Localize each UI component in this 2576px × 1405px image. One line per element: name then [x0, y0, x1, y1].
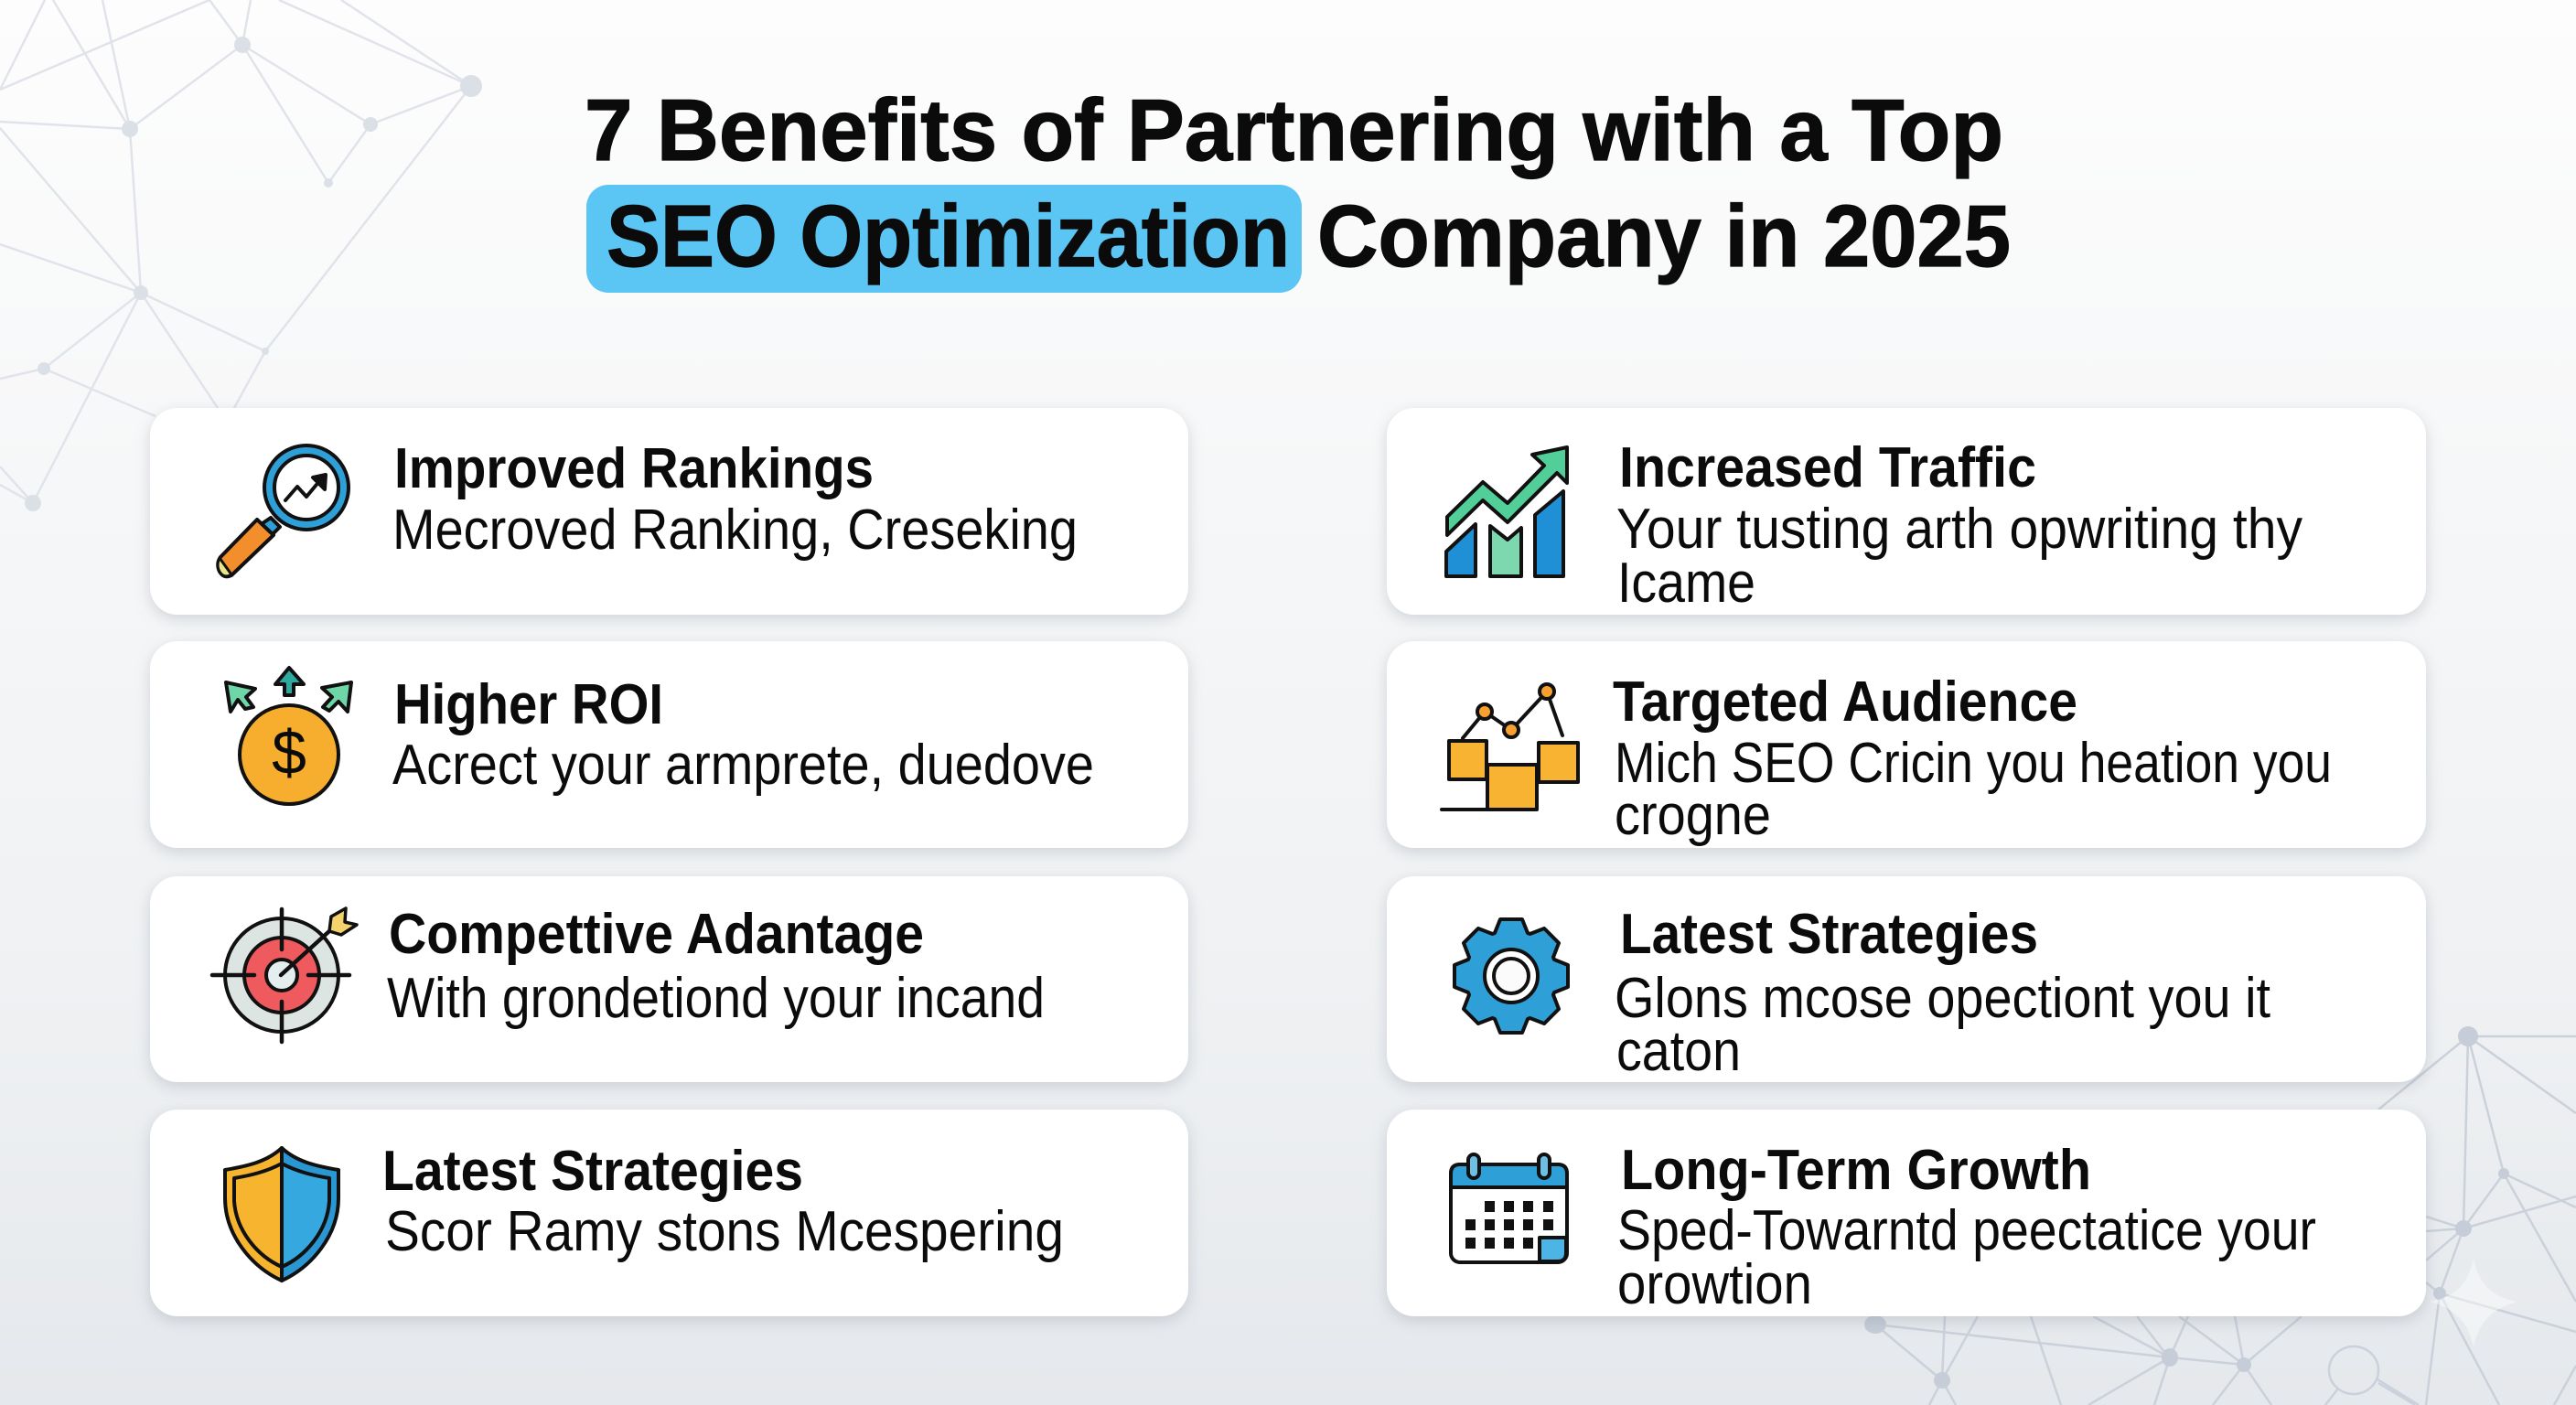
heading: Latest Strategies: [1620, 903, 2038, 966]
sparkle watermark: [2430, 1259, 2517, 1346]
card background: [1387, 641, 2426, 848]
title: [585, 81, 2011, 293]
icon: target with arrow: [212, 908, 357, 1042]
icon: dollar coin with arrows: [226, 668, 351, 804]
icon: magnifying glass: [218, 445, 349, 576]
heading: Higher ROI: [394, 673, 663, 736]
panel: Competitive Advantage: [150, 876, 1188, 1082]
panel: Improved Rankings: [150, 408, 1188, 615]
heading: Compettive Adantage: [389, 903, 924, 966]
heading: Increased Traffic: [1619, 436, 2036, 499]
card background: [150, 1110, 1188, 1316]
icon: calendar: [1451, 1154, 1567, 1262]
heading: Latest Strategies: [382, 1140, 803, 1203]
icon: growth chart: [1446, 447, 1567, 576]
card background: [150, 641, 1188, 848]
description: Mecroved Ranking, Creseking: [392, 499, 1078, 562]
panel: Higher ROI: [150, 641, 1188, 848]
panel: Targeted Audience: [1387, 641, 2426, 848]
card background: [1387, 1110, 2426, 1316]
panel: Long-Term Growth: [1387, 1110, 2426, 1316]
panel: Increased Traffic: Icame: [1617, 552, 1755, 615]
card background: [1387, 876, 2426, 1082]
description: With grondetiond your incand: [387, 967, 1045, 1030]
description: Glons mcose opectiont you it: [1615, 967, 2270, 1030]
title line 1: 7 Benefits of Partnering with a Top: [585, 81, 2003, 179]
description: Your tusting arth opwriting thy: [1616, 498, 2302, 561]
heading: Improved Rankings: [394, 437, 874, 500]
icon: connected blocks: [1442, 684, 1578, 810]
heading: Targeted Audience: [1613, 670, 2077, 734]
panel: Latest Strategies (shield): [150, 1110, 1188, 1316]
panel: Targeted Audience: crogne: [1615, 784, 1771, 847]
title highlighted phrase: SEO Optimization: [606, 188, 1290, 285]
network pattern: top left: [0, 0, 482, 511]
title line 2: Company in 2025: [1317, 188, 2011, 285]
description: Mich SEO Cricin you heation you: [1615, 732, 2332, 795]
icon: gear: [1454, 919, 1568, 1033]
panel: Latest Strategies (gear): caton: [1616, 1020, 1741, 1083]
description: Scor Ramy stons Mcespering: [385, 1200, 1064, 1263]
card background: [1387, 408, 2426, 615]
title highlight pill: [586, 185, 1302, 293]
card background: [150, 408, 1188, 615]
panel: Latest Strategies (gear): [1387, 876, 2426, 1083]
heading: Long-Term Growth: [1621, 1139, 2091, 1202]
description: Sped-Towarntd peectatice your: [1617, 1199, 2316, 1262]
panel: Long-Term Growth: orowtion: [1617, 1253, 1812, 1316]
description: Acrect your armprete, duedove: [392, 734, 1094, 797]
network pattern: bottom right: [1864, 1026, 2576, 1405]
card background: [150, 876, 1188, 1082]
icon: shield: [225, 1148, 338, 1281]
panel: Increased Traffic: [1387, 408, 2426, 615]
icon: dollar coin with arrows: $: [272, 718, 306, 788]
